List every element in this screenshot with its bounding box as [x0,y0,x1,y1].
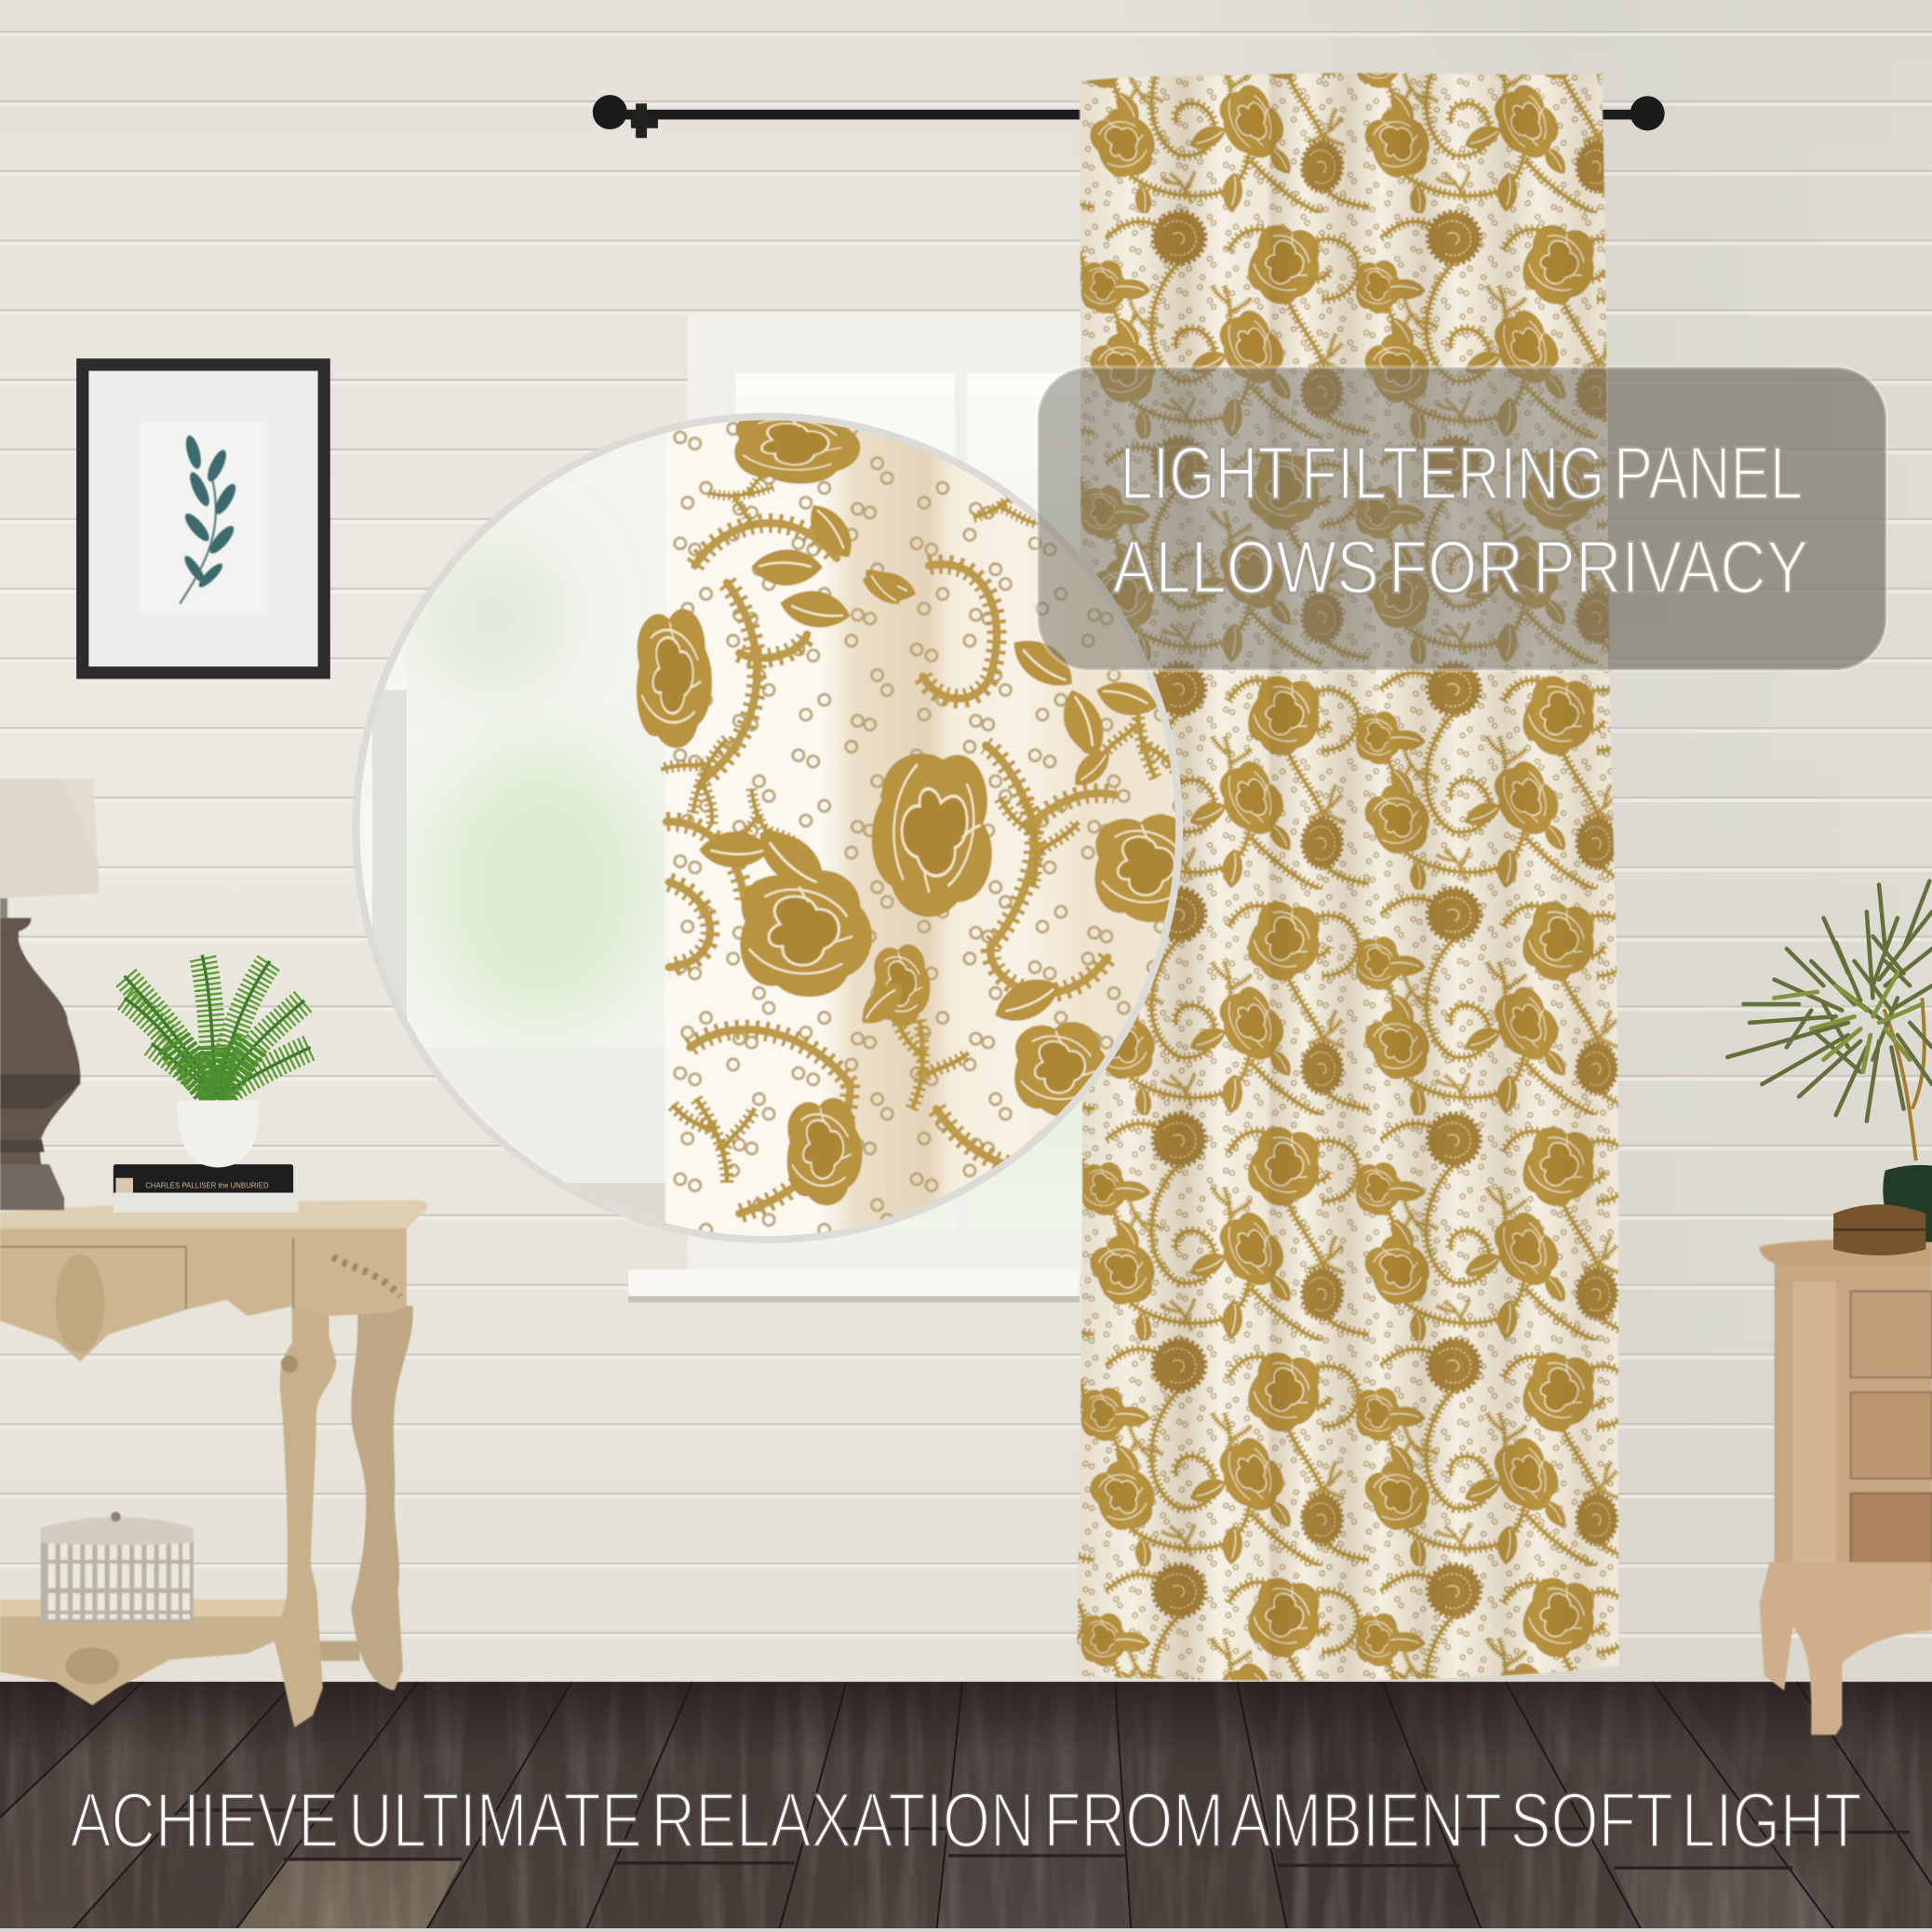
right potted plant [1727,881,1932,1255]
dresser [1760,1239,1932,1735]
table top [0,1201,427,1228]
potted fern [125,955,311,1167]
blurred window view [359,432,670,1184]
callout panel: light filtering [1038,368,1886,670]
woven basket [1833,1204,1925,1255]
thorny vines [666,523,1115,1214]
books: CHARLES PALLISER the UNBURIED [145,1180,269,1189]
table front leg [274,1306,336,1727]
flowers and leaves [872,754,992,917]
icon: leaf sprig [180,434,239,604]
framed botanical art [76,358,330,679]
zoomed fabric [637,408,1201,1251]
table back leg [351,1306,413,1690]
curtain rod [593,95,1665,138]
table apron [0,1228,407,1362]
window [628,315,1081,1302]
wood floor [0,1682,1932,1932]
table lamp [0,779,99,1210]
curtain panel [1077,74,1619,1681]
callout text [1113,432,1809,610]
storage basket [41,1512,194,1624]
magnifier circle: curtain fabric close-up [345,407,1201,1256]
books [114,1164,298,1213]
thorny sprigs [650,458,1180,1191]
table lower shelf [0,1600,286,1705]
callout text: ALLOWS FOR PRIVACY [1113,526,1809,610]
console table [0,1201,427,1727]
